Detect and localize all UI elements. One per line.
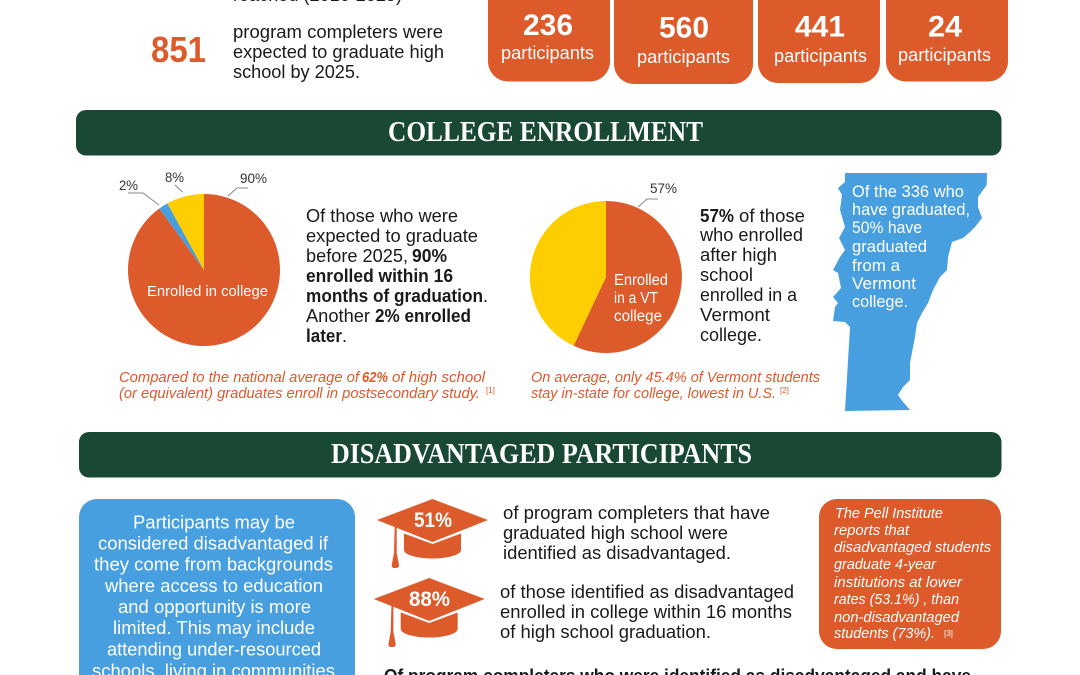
icon: graduation cap 88% <box>374 578 485 647</box>
text: 57% enrolled in Vermont <box>699 206 805 345</box>
text: 90% enrolled within 16 months: expected to graduate <box>306 226 478 246</box>
panel: definition of disadvantaged: Participants may be <box>133 512 295 532</box>
text: 51% disadvantaged <box>503 503 770 563</box>
heading: disadvantaged participants <box>79 432 1002 478</box>
caption: national average: 62% <box>362 369 388 386</box>
panel: definition of disadvantaged: they come from backgrounds <box>94 554 333 574</box>
text: 88% enrolled: enrolled in college within 16 months <box>500 602 792 622</box>
callout: Pell Institute <box>819 499 1001 649</box>
stat: 851 program completers: expected to graduate high <box>233 42 444 62</box>
panel: definition of disadvantaged: limited. This may include <box>113 618 315 638</box>
panel: definition of disadvantaged: where access to education <box>104 576 323 596</box>
map: Vermont: Of the 336 who <box>852 182 964 201</box>
callout: Pell Institute: [3] <box>944 629 953 638</box>
text: 51% disadvantaged: of program completers that have <box>503 503 770 523</box>
card: 441 participants: participants <box>774 46 867 66</box>
caption: in-state average: stay in-state for college, lowest in U.S. <box>531 385 776 402</box>
panel: definition of disadvantaged: considered disadvantaged if <box>98 534 329 554</box>
caption: in-state average: [2] <box>780 386 789 395</box>
stat: 851 program completers: school by 2025. <box>233 62 360 82</box>
callout: Pell Institute: graduate 4-year <box>834 556 937 573</box>
text: 57% enrolled in Vermont: after high <box>700 245 777 265</box>
card: 24 participants: participants <box>898 45 991 65</box>
text: 57% enrolled in Vermont: who enrolled <box>699 225 803 245</box>
heading: disadvantaged participants: DISADVANTAGED PARTICIPANTS <box>331 439 752 470</box>
text: 90% enrolled within 16 months: . <box>483 286 488 306</box>
pie chart: enrolled in college: Enrolled in college <box>147 283 268 300</box>
pie chart: enrolled in a VT college: 57% <box>650 180 677 196</box>
card: 236 participants: 236 <box>523 9 573 42</box>
pie chart: enrolled in a VT college <box>530 180 682 353</box>
text: 90% enrolled within 16 months: later <box>306 326 342 346</box>
callout: Pell Institute: rates (53.1%) , than <box>834 591 959 608</box>
text: 88% enrolled: of high school graduation. <box>500 622 711 642</box>
map: Vermont: Vermont <box>852 274 916 293</box>
panel: definition of disadvantaged <box>79 499 355 675</box>
card: 24 participants: 24 <box>928 10 962 44</box>
caption: national average: (or equivalent) graduates enroll in postsecondary study. <box>119 385 480 402</box>
panel: definition of disadvantaged: attending under-resourced <box>107 640 321 660</box>
text: 90% enrolled within 16 months: 2% enrolled <box>375 306 471 326</box>
text: 90% enrolled within 16 months: . <box>342 326 347 346</box>
card: 560 participants: 560 <box>659 12 709 44</box>
text: 88% enrolled <box>500 582 794 642</box>
text: 51% disadvantaged: identified as disadvantaged. <box>503 543 731 563</box>
card: 560 participants <box>614 0 753 84</box>
text: 51% disadvantaged: graduated high school were <box>503 523 728 543</box>
caption: national average <box>119 369 495 402</box>
text: 90% enrolled within 16 months: enrolled within 16 <box>306 266 453 286</box>
icon: graduation cap 88%: 88% <box>409 588 450 611</box>
card: 441 participants: 441 <box>795 10 845 44</box>
card: 441 participants <box>758 0 880 83</box>
pie chart: enrolled in college: 2% <box>119 177 138 193</box>
panel: definition of disadvantaged: and opportunity is more <box>118 597 311 617</box>
callout: Pell Institute: non-disadvantaged <box>834 609 960 626</box>
text: 90% enrolled within 16 months: months of graduation <box>306 286 483 306</box>
map: Vermont: have graduated, <box>852 200 970 219</box>
map: Vermont: graduated <box>852 237 927 256</box>
card: 236 participants: participants <box>501 43 594 63</box>
pie chart: enrolled in a VT college: Enrolled <box>614 272 668 289</box>
callout: Pell Institute: disadvantaged students <box>834 539 991 556</box>
text: 90% enrolled within 16 months: 90% <box>412 246 447 266</box>
text: 57% enrolled in Vermont: of those <box>739 206 805 226</box>
callout: Pell Institute: institutions at lower <box>834 574 963 591</box>
map: Vermont: college. <box>852 292 908 311</box>
stat: 851 program completers: 851 <box>151 29 206 70</box>
text: 57% enrolled in Vermont: school <box>700 265 753 285</box>
caption: in-state average <box>531 369 820 402</box>
heading: college enrollment <box>76 110 1002 156</box>
text: 90% enrolled within 16 months: Of those who were <box>306 206 458 226</box>
text: 57% enrolled in Vermont: enrolled in a <box>700 285 798 305</box>
card: 24 participants <box>886 0 1008 82</box>
heading: college enrollment: COLLEGE ENROLLMENT <box>388 117 703 148</box>
pie chart: enrolled in college: 8% <box>165 169 184 185</box>
stat: 851 program completers <box>151 22 444 82</box>
callout: Pell Institute: students (73%). <box>834 625 935 642</box>
caption: in-state average: On average, only 45.4% of Vermont students <box>531 369 820 386</box>
caption: national average: of high school <box>392 369 486 386</box>
text: 57% enrolled in Vermont: Vermont <box>700 305 770 325</box>
pie chart: enrolled in a VT college: in a VT <box>614 290 658 307</box>
card: 560 participants: participants <box>637 47 730 67</box>
map: Vermont: from a <box>852 256 901 275</box>
stat: 851 program completers: program completers were <box>233 22 443 42</box>
text: 90% enrolled within 16 months: Another <box>306 306 370 326</box>
text: 90% enrolled within 16 months: before 2025, <box>306 246 408 266</box>
card: 236 participants <box>488 0 610 82</box>
caption: national average: Compared to the national average of <box>119 369 361 386</box>
callout: Pell Institute: reports that <box>834 522 910 539</box>
text: 57% enrolled in Vermont: college. <box>700 325 762 345</box>
icon: graduation cap 51%: 51% <box>414 509 452 532</box>
pie chart: enrolled in college <box>119 169 280 346</box>
pie chart: enrolled in a VT college: college <box>614 308 662 325</box>
text: 90% enrolled within 16 months <box>306 206 488 346</box>
caption: national average: [1] <box>486 386 495 395</box>
text: 57% enrolled in Vermont: 57% <box>700 206 734 226</box>
icon: graduation cap 51% <box>377 499 488 568</box>
map: Vermont <box>833 173 987 411</box>
text: 88% enrolled: of those identified as disadvantaged <box>500 582 794 602</box>
callout: Pell Institute: The Pell Institute <box>835 505 943 522</box>
pie chart: enrolled in college: 90% <box>240 170 267 186</box>
map: Vermont: 50% have <box>852 218 922 237</box>
